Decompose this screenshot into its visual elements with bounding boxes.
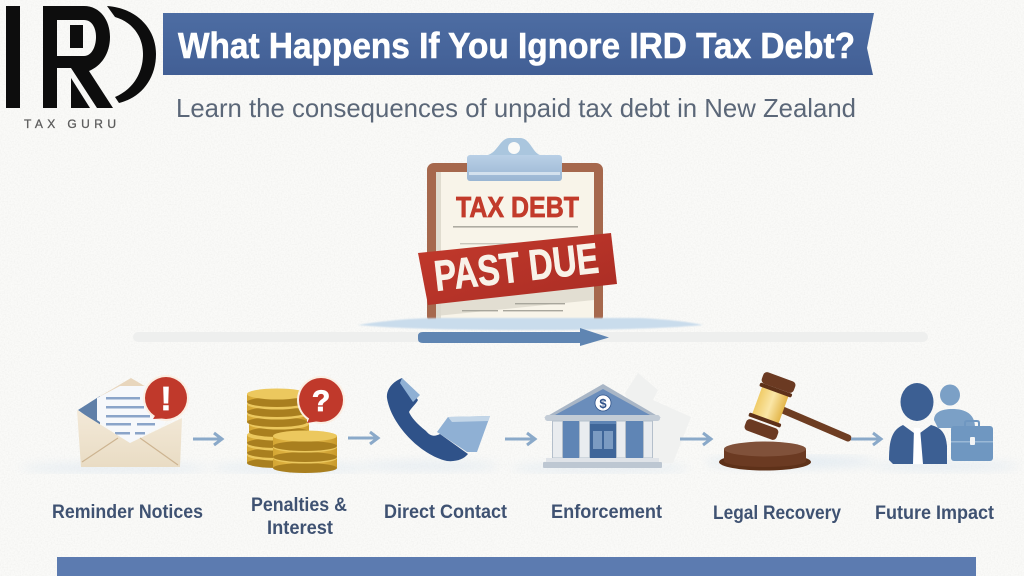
alert badge: ! xyxy=(160,380,172,417)
arrow 2 xyxy=(348,432,378,444)
arrow 5 xyxy=(851,433,881,445)
bottom panel xyxy=(57,557,976,576)
icon: envelope with alert xyxy=(77,375,189,467)
title banner xyxy=(163,13,874,75)
label: penalties and interest: Interest xyxy=(267,518,334,539)
title banner: What Happens If You Ignore IRD Tax Debt? xyxy=(178,25,855,66)
icon: coin stacks with question badge xyxy=(247,376,345,473)
arrow 3 xyxy=(505,433,535,445)
label: future impact: Future Impact xyxy=(875,503,995,524)
icon: telephone handset xyxy=(387,378,490,461)
heading: tax debt: TAX DEBT xyxy=(456,192,579,224)
label: legal recovery: Legal Recovery xyxy=(713,503,841,524)
logo: IRD Tax Guru: TAX GURU xyxy=(24,117,116,131)
timeline track with arrow xyxy=(133,318,928,346)
arrow 4 xyxy=(680,433,711,445)
icon: bank building xyxy=(543,373,691,468)
letter paper xyxy=(97,386,165,443)
labels xyxy=(52,495,995,539)
briefcase xyxy=(951,421,993,461)
logo: IRD Tax Guru xyxy=(6,6,156,131)
clipboard: tax debt past due xyxy=(418,138,617,323)
ground shadow xyxy=(20,456,1020,472)
label: penalties and interest: Penalties & xyxy=(251,495,347,516)
question badge: ? xyxy=(312,385,330,418)
label: penalties and interest xyxy=(251,495,347,539)
icon: gavel xyxy=(719,371,848,470)
clipboard clip xyxy=(467,138,562,181)
subtitle: Learn the consequences of unpaid tax debt in New Zealand xyxy=(176,93,856,123)
arrow 1 xyxy=(193,433,222,445)
label: reminder notices: Reminder Notices xyxy=(52,502,203,523)
label: direct contact: Direct Contact xyxy=(384,502,508,523)
label: enforcement: Enforcement xyxy=(551,502,663,523)
dollar coin: $ xyxy=(599,396,607,411)
ribbon: past due: PAST DUE xyxy=(432,235,601,301)
icon: people with briefcase xyxy=(889,383,993,464)
dollar coin xyxy=(595,395,611,411)
